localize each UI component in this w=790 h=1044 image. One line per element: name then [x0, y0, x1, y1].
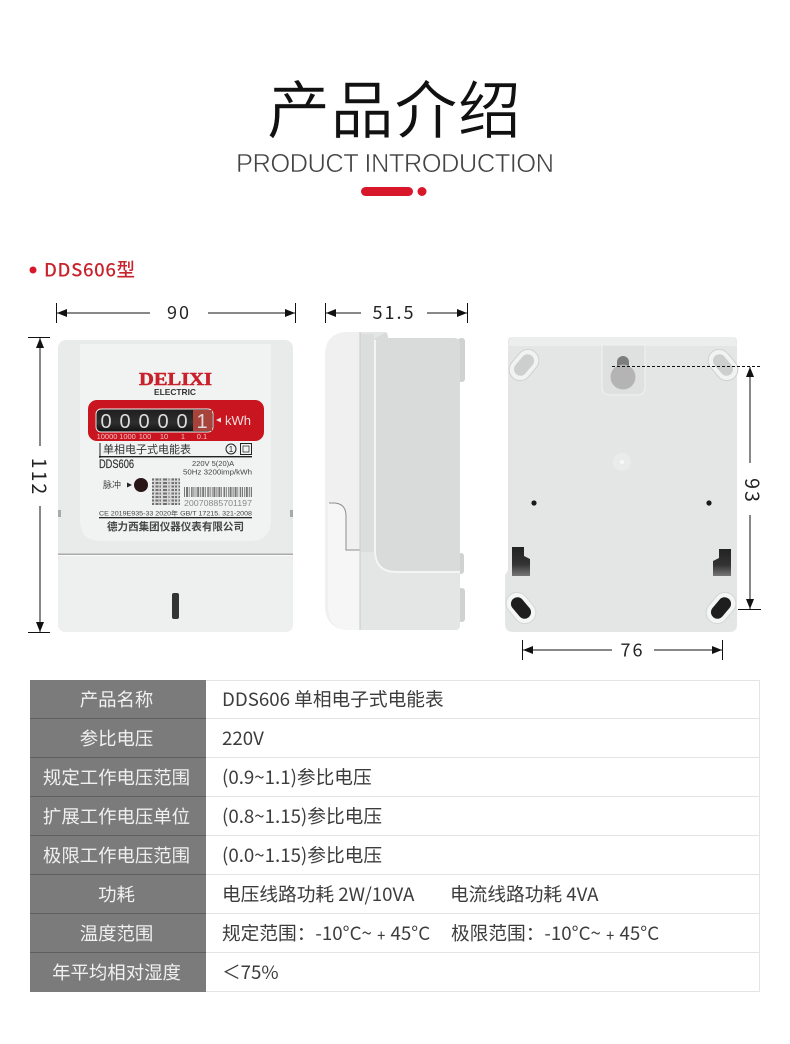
- nameplate text: [99, 441, 252, 492]
- barcode: 20070885701197: [184, 499, 253, 508]
- row: annual average humidity: 年平均相对湿度: [52, 959, 181, 985]
- logo: ELECTRIC: [154, 387, 196, 397]
- row: power consumption: 电压线路功耗 2W/10VA: [222, 880, 415, 907]
- dimension: depth 51.5: [326, 299, 468, 325]
- row: limit operating voltage range: 极限工作电压范围: [43, 842, 190, 868]
- dimension: width 90: [56, 299, 296, 325]
- subtitle: PRODUCT INTRODUCTION: [236, 150, 554, 178]
- nameplate text: 50Hz 3200imp/kWh: [183, 468, 252, 476]
- row: specified operating voltage range: 规定工作电压范围: [43, 764, 190, 790]
- title: 产品介绍: [267, 61, 521, 152]
- red counter panel: 0.1: [197, 432, 207, 441]
- dimension: width 90: 90: [167, 299, 191, 325]
- row: specified operating voltage range: (0.9~1.1)参比电压: [222, 763, 372, 790]
- front cover: [325, 332, 360, 630]
- specification table: [30, 680, 760, 992]
- barcode: [184, 488, 253, 508]
- red counter panel: 1: [196, 411, 208, 433]
- dimension: height 112: [26, 338, 55, 632]
- red counter panel: 10000: [97, 432, 117, 441]
- row: reference voltage: [80, 724, 264, 751]
- mounting slots: [502, 345, 742, 628]
- dimension: height 112: 112: [26, 458, 55, 496]
- row: power consumption: [98, 880, 599, 907]
- red counter panel: 0: [119, 411, 131, 433]
- row: temperature range: 极限范围：-10°C~﹢45°C: [451, 919, 659, 946]
- terminal cover slot: [172, 593, 179, 619]
- row: power consumption: 功耗: [98, 881, 135, 907]
- row: product name: 产品名称: [80, 686, 153, 712]
- standards line and company name: 德力西集团仪器仪表有限公司: [107, 519, 244, 534]
- case: [360, 332, 460, 630]
- row: extended operating voltage: [43, 802, 382, 829]
- product photo: front view of meter: [58, 340, 293, 632]
- row: reference voltage: 220V: [222, 724, 264, 751]
- row: limit operating voltage range: (0.0~1.15)参比电压: [222, 841, 382, 868]
- centre mark and screw dots: [531, 453, 712, 506]
- row: limit operating voltage range: [43, 841, 382, 868]
- row: product name: DDS606 单相电子式电能表: [222, 685, 444, 712]
- nameplate text: 单相电子式电能表: [103, 441, 191, 457]
- red counter panel: 0: [176, 411, 188, 433]
- row: annual average humidity: [52, 958, 279, 985]
- title accent bar and dot: [361, 187, 426, 196]
- red counter panel: kWh: [225, 413, 251, 428]
- dimension: hole spacing 76: 76: [621, 636, 644, 662]
- row: temperature range: 温度范围: [80, 920, 153, 946]
- dimension: hole spacing 93: 93: [739, 478, 768, 504]
- row: extended operating voltage: (0.8~1.15)参比电压: [222, 802, 382, 829]
- dimension: depth 51.5: 51.5: [373, 299, 415, 325]
- row: temperature range: [80, 919, 659, 946]
- row: specified operating voltage range: [43, 763, 372, 790]
- nameplate text: 220V 5(20)A: [192, 459, 234, 468]
- row: temperature range: 规定范围：-10°C~﹢45°C: [222, 919, 430, 946]
- QR code: [152, 478, 180, 505]
- red counter panel: 100: [139, 432, 151, 441]
- red counter panel: 0: [100, 411, 112, 433]
- meter body: [58, 340, 293, 632]
- section heading: DDS606: DDS606型: [44, 256, 135, 282]
- red counter panel: 0: [157, 411, 169, 433]
- row: power consumption: 电流线路功耗 4VA: [450, 880, 599, 907]
- side nubs: [458, 338, 465, 622]
- red counter panel: 0: [138, 411, 150, 433]
- red counter panel: 10: [160, 432, 168, 441]
- dimension: hole spacing 76: [522, 636, 722, 662]
- row: extended operating voltage: 扩展工作电压单位: [43, 803, 190, 829]
- red counter panel: 1: [181, 432, 185, 441]
- product photo: side view of meter: [325, 332, 465, 630]
- table label column: [30, 680, 206, 992]
- product photo: back view of meter: [502, 337, 742, 632]
- row: reference voltage: 参比电压: [80, 725, 153, 751]
- row: product name: [80, 685, 444, 712]
- logo: [139, 369, 212, 397]
- nameplate text: DDS606: [99, 459, 134, 471]
- nameplate text: 脉冲: [103, 478, 121, 491]
- keyhole mount: [602, 345, 645, 395]
- red counter panel: 1000: [119, 432, 136, 441]
- standards line and company name: [99, 508, 252, 534]
- rectangular windows: [512, 547, 731, 576]
- logo: DELIXI: [139, 369, 212, 389]
- red counter panel: [88, 400, 264, 441]
- back plate: [505, 337, 737, 632]
- standards line and company name: CE 2019E935-33 2020年 GB/T 17215. 321-2008: [99, 508, 252, 518]
- row: annual average humidity: ＜75%: [222, 958, 279, 985]
- nameplate text: 1: [229, 445, 234, 454]
